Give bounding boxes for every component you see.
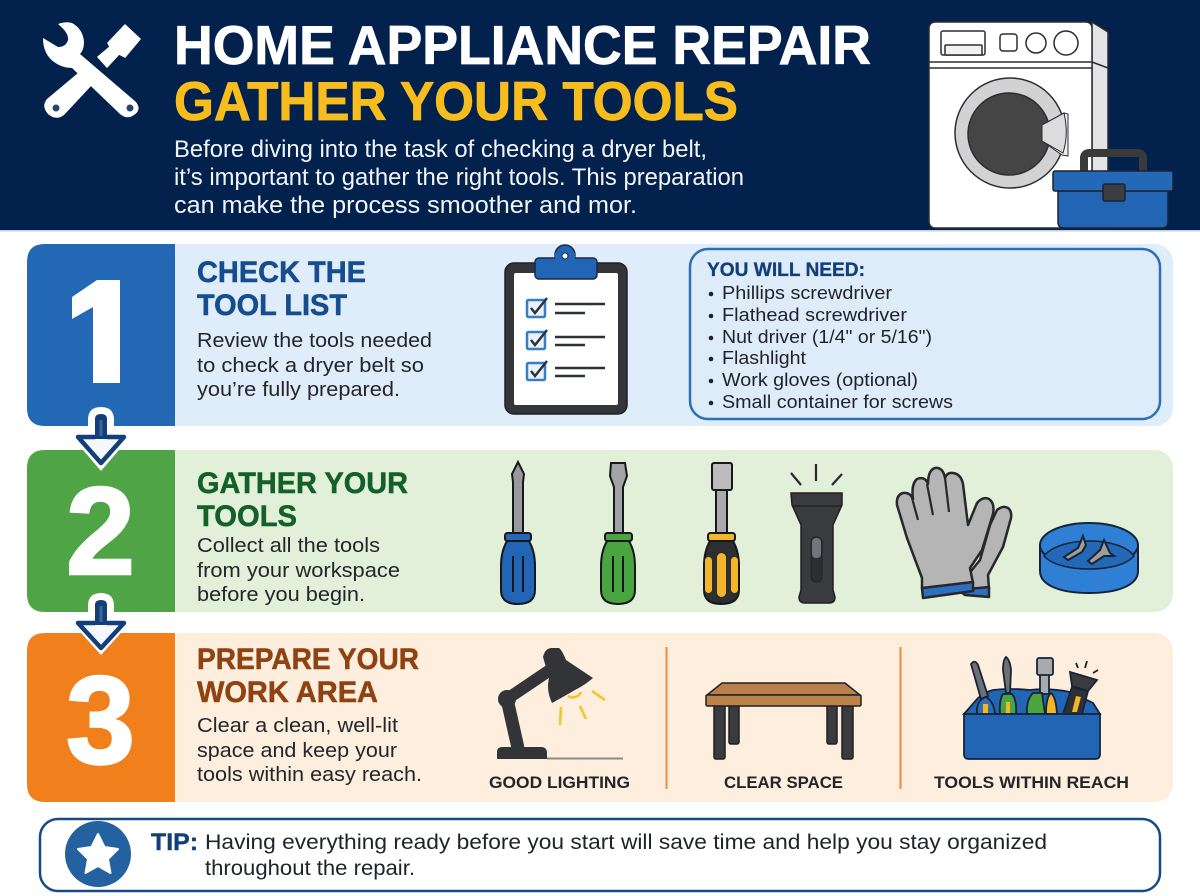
panel: you will need list: YOU WILL NEED:	[707, 260, 865, 281]
panel: you will need list: Flathead screwdriver	[722, 304, 907, 325]
callout: tip	[40, 819, 1160, 891]
step 2 heading	[197, 467, 408, 533]
step 1 number block: 1	[58, 256, 136, 413]
step 3 description: space and keep your	[197, 739, 397, 762]
step 1 description: to check a dryer belt so	[197, 354, 424, 377]
icon: blue toolbox	[1053, 153, 1173, 228]
panel: you will need list: Phillips screwdriver	[722, 282, 892, 303]
intro text: Before diving into the task of checking a dryer belt,	[174, 136, 707, 163]
step 2 heading: GATHER YOUR	[197, 467, 408, 500]
step 2 background	[27, 450, 1173, 612]
icon: star badge	[65, 821, 131, 887]
panel: you will need list	[690, 249, 1160, 419]
intro text: can make the process smoother and mor.	[174, 192, 637, 219]
tip text	[151, 829, 1047, 880]
label: tools within reach: TOOLS WITHIN REACH	[934, 773, 1129, 792]
icon: crossed wrench and screwdriver	[43, 22, 140, 118]
step 3 description	[197, 714, 422, 786]
tip text: Having everything ready before you start will save time and help you stay organized	[205, 831, 1047, 854]
step 3 heading: PREPARE YOUR	[197, 643, 419, 676]
tip text: throughout the repair.	[205, 857, 415, 880]
tip text: TIP:	[151, 829, 198, 856]
step 1 heading: CHECK THE	[197, 256, 366, 289]
front glove	[897, 468, 994, 589]
step 1 background	[27, 244, 1173, 426]
icon: desk lamp good lighting	[497, 648, 623, 759]
icon: flathead screwdriver	[601, 463, 635, 604]
title: GATHER YOUR TOOLS	[174, 70, 738, 132]
step 3 description: Clear a clean, well-lit	[197, 714, 398, 737]
icon: nut driver	[704, 463, 739, 604]
label: good lighting: GOOD LIGHTING	[489, 773, 630, 792]
step 2 description: from your workspace	[197, 559, 400, 582]
step 2 description: before you begin.	[197, 583, 365, 606]
back glove	[955, 507, 1011, 591]
step 2 description: Collect all the tools	[197, 534, 380, 557]
intro text	[174, 136, 744, 219]
icon: clipboard with checklist	[505, 245, 627, 414]
panel: you will need list: Small container for screws	[722, 391, 953, 412]
step 2 number block	[27, 450, 175, 612]
label: clear space: CLEAR SPACE	[724, 773, 843, 792]
header band	[0, 0, 1200, 232]
step 1 number block	[27, 244, 175, 426]
title: HOME APPLIANCE REPAIR	[174, 14, 871, 76]
icon: small container with screws	[1040, 523, 1138, 593]
panel: step 1 check the tool list	[27, 244, 1173, 426]
intro text: it’s important to gather the right tools. This preparation	[174, 164, 744, 191]
step 1 description: Review the tools needed	[197, 329, 432, 352]
arrow: step 1 to step 2	[65, 407, 137, 471]
step 2 description	[197, 534, 400, 606]
step 1 heading: TOOL LIST	[197, 289, 347, 322]
panel: you will need list: Flashlight	[722, 347, 806, 368]
step 2 number block: 2	[66, 463, 135, 601]
step 3 background	[27, 633, 1173, 802]
step 1 description: you’re fully prepared.	[197, 378, 400, 401]
icon: work gloves	[897, 468, 1011, 598]
step 3 number block: 3	[66, 652, 135, 790]
panel: you will need list: Work gloves (optional)	[722, 369, 918, 390]
icon: washing machine	[929, 22, 1108, 228]
step 2 heading: TOOLS	[197, 500, 297, 533]
step 3 description: tools within easy reach.	[197, 763, 422, 786]
icon: tools in a box	[964, 657, 1100, 759]
step 3 number block	[27, 633, 175, 802]
panel: you will need list: Nut driver (1/4" or 5/16")	[722, 326, 932, 347]
step 3 heading: WORK AREA	[197, 676, 378, 709]
panel: step 3 prepare your work area	[27, 633, 1173, 802]
step 1 heading	[197, 256, 366, 322]
icon: clear table	[706, 683, 861, 759]
icon: phillips screwdriver	[501, 462, 535, 604]
icon: flashlight	[791, 464, 842, 603]
title	[174, 14, 871, 132]
step 1 description	[197, 329, 432, 401]
panel: step 2 gather your tools	[27, 450, 1173, 612]
step 3 heading	[197, 643, 419, 709]
arrow: step 2 to step 3	[65, 593, 137, 655]
